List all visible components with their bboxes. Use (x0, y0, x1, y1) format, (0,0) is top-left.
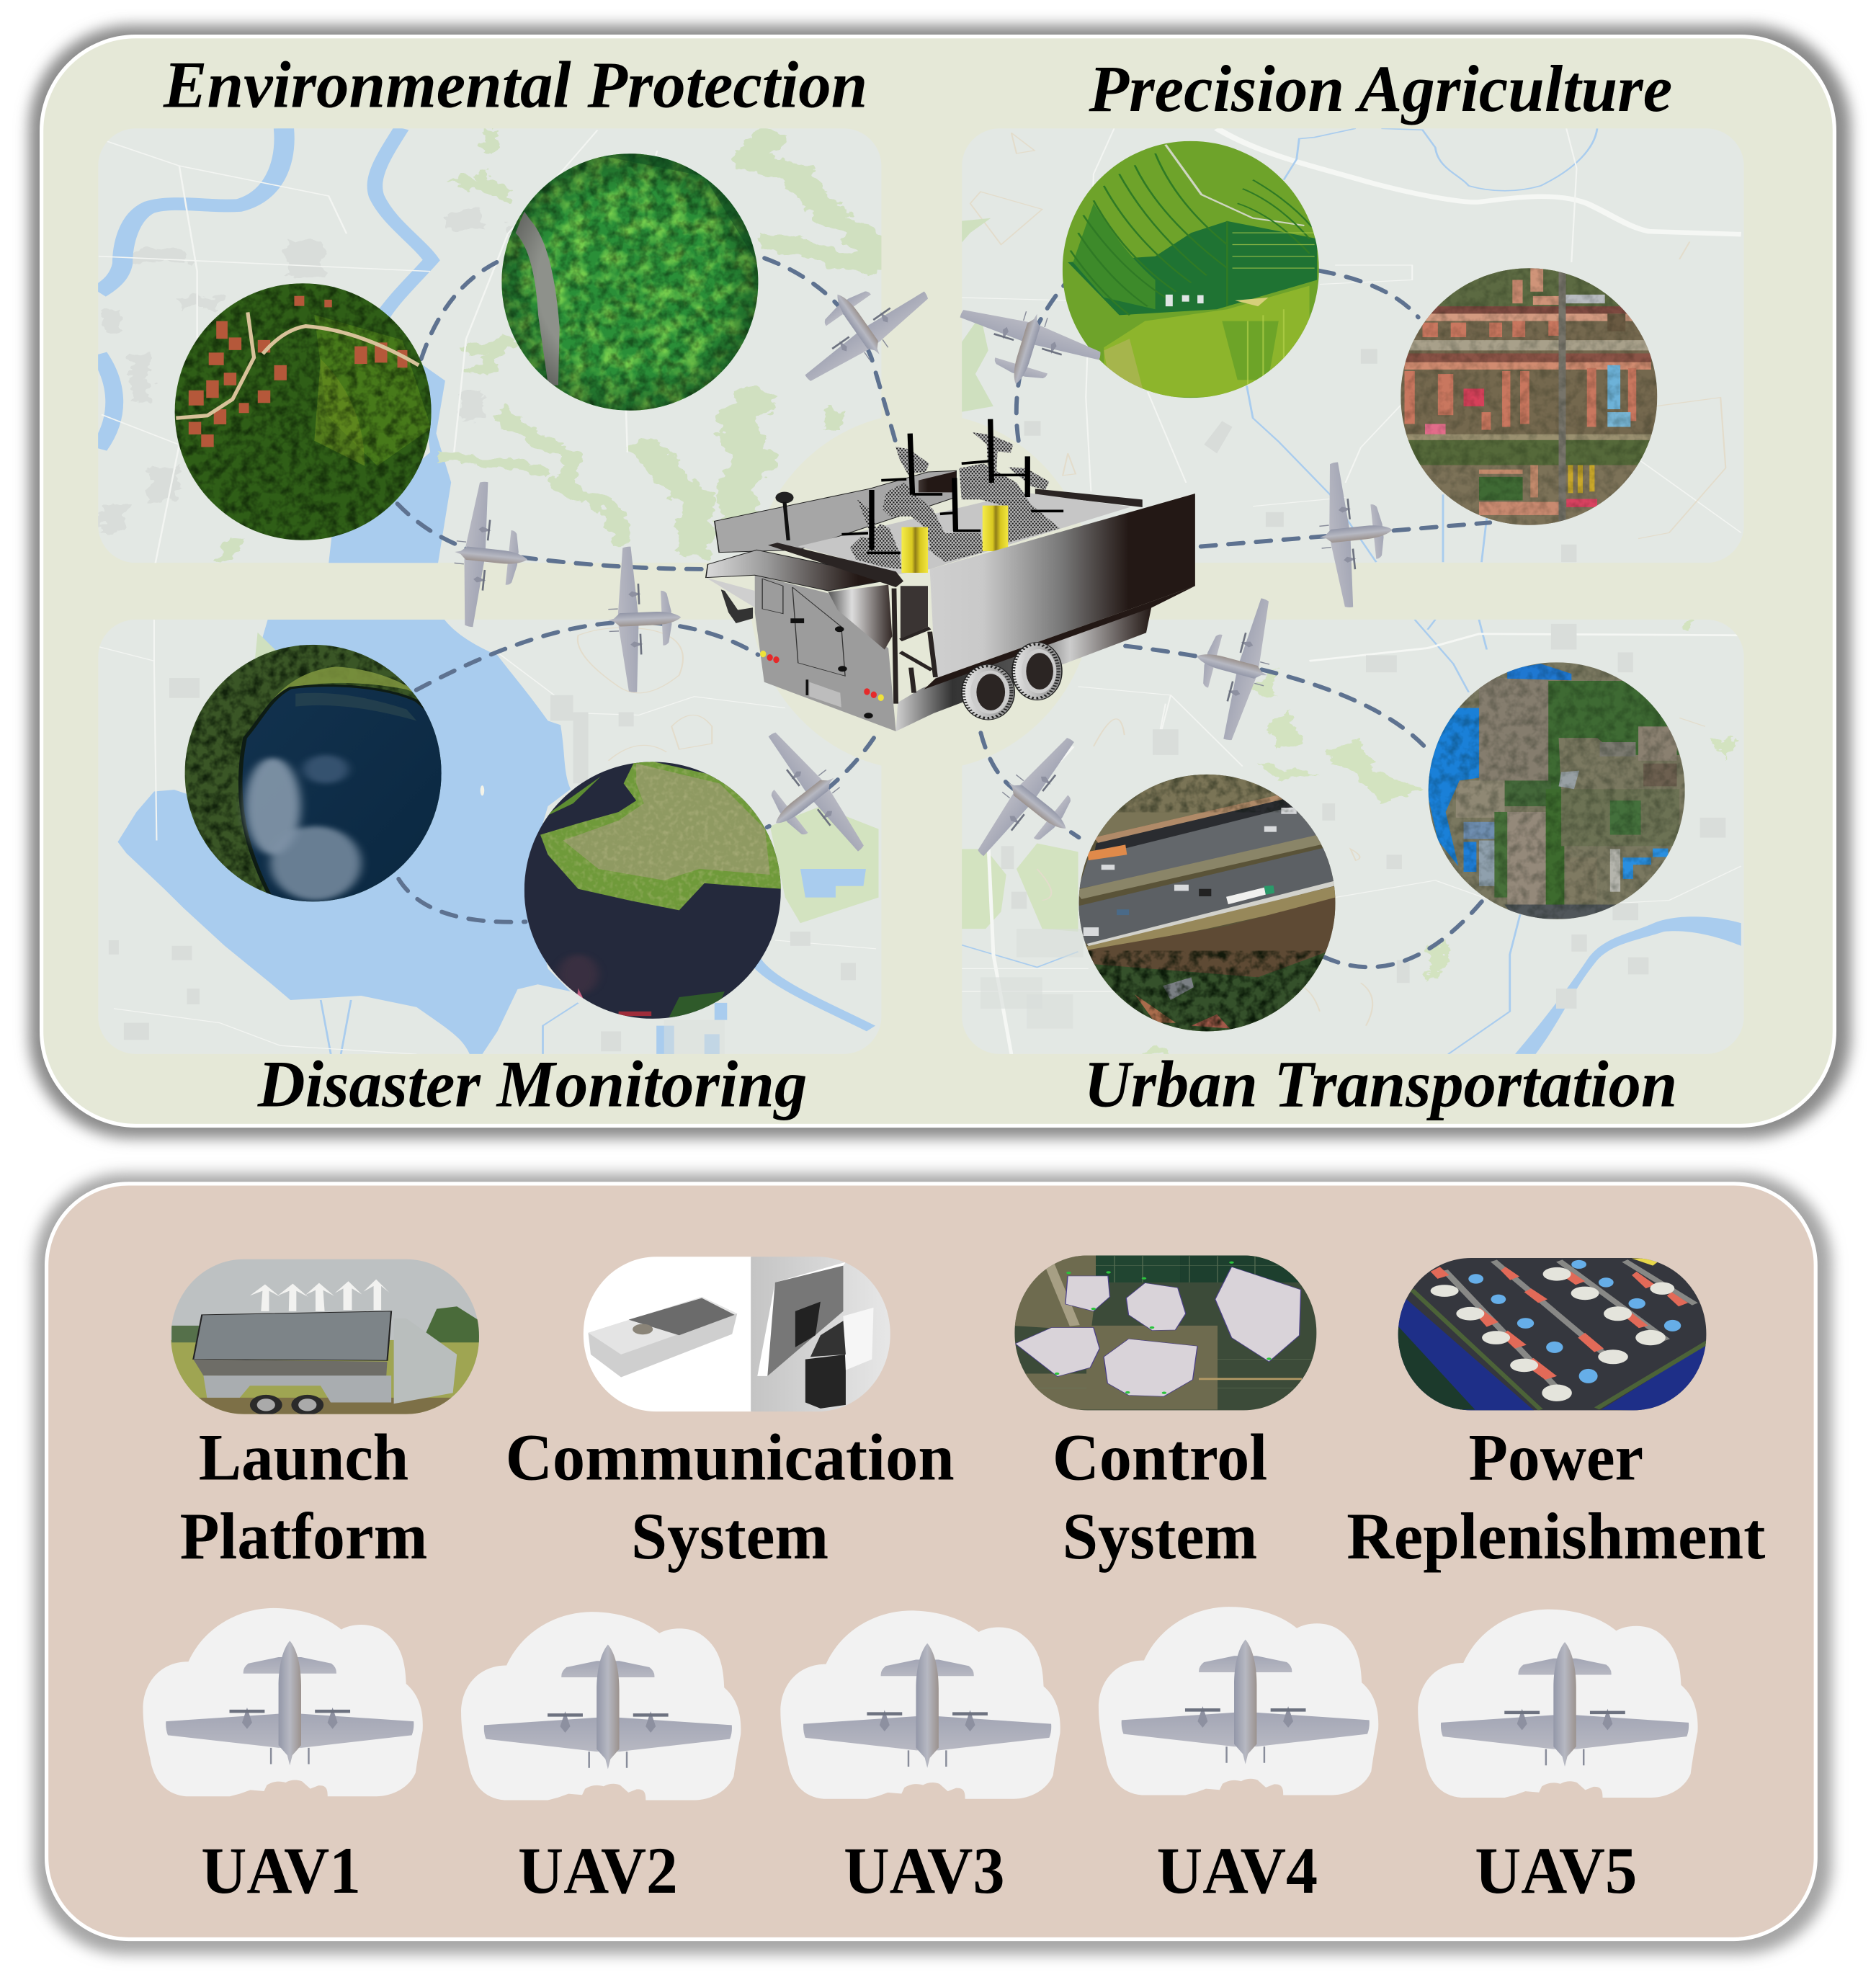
central clearing behind the launch vehicle (749, 413, 1094, 771)
photo: town rooftops (1401, 268, 1657, 525)
UAV5 card (1418, 1610, 1698, 1908)
heading: environmental protection: Environmental Protection (163, 48, 867, 122)
UAV3 card: UAV3 (844, 1834, 1005, 1908)
plane: agriculture route, lower (1312, 458, 1400, 610)
antenna mast (775, 492, 794, 540)
photo: terraced fields (1063, 141, 1319, 398)
launch vehicle illustration (706, 419, 1195, 731)
heading: precision agriculture: Precision Agriculture (1088, 53, 1672, 126)
plane: agriculture route, upper (946, 293, 1107, 405)
plane: urban route, upper (1178, 586, 1286, 746)
panel: system components (34, 1174, 1832, 1954)
label: communication system: Communication (506, 1422, 955, 1495)
flight paths: dashed routes (398, 258, 1490, 967)
map: environmental protection (98, 128, 881, 563)
UAV4 card (1099, 1607, 1378, 1908)
map: precision agriculture (960, 128, 1744, 563)
heading: urban transportation: Urban Transportation (1084, 1048, 1677, 1121)
thumbnail: communication hardware (578, 1254, 895, 1414)
label: control system (1053, 1422, 1267, 1574)
photo: village and hillside (175, 283, 432, 540)
label: communication system: System (631, 1500, 828, 1574)
overhanging hood (706, 550, 896, 591)
UAV2 card (461, 1612, 741, 1908)
UAV3 card (780, 1610, 1060, 1908)
plane: disaster route, upper (605, 545, 684, 693)
label: power replenishment: Replenishment (1346, 1500, 1766, 1574)
plane: disaster route, lower (731, 720, 878, 880)
label: control system: System (1063, 1500, 1257, 1574)
label: launch platform: Launch (199, 1422, 408, 1495)
yellow launch cylinders (901, 506, 1008, 573)
tail lights (760, 651, 884, 701)
label: power replenishment (1346, 1422, 1766, 1574)
map: urban transportation (960, 620, 1744, 1056)
UAV1 card (143, 1608, 423, 1908)
rear face with doors (755, 575, 896, 731)
UAV5 card: UAV5 (1475, 1834, 1637, 1908)
photo: industrial site (1425, 662, 1685, 919)
thumbnail: control system map (1011, 1254, 1321, 1412)
side wall (930, 494, 1195, 679)
thumbnail: launch platform photo (164, 1256, 487, 1417)
photo: dark lake with forest shore (185, 645, 447, 906)
plane: environmental route, lower (447, 479, 535, 632)
label: launch platform: Platform (180, 1500, 427, 1574)
heading: disaster monitoring: Disaster Monitoring (257, 1048, 807, 1121)
frame bars (894, 589, 935, 704)
panel: application scenarios (29, 25, 1851, 1138)
UAV4 card: UAV4 (1157, 1834, 1318, 1908)
plane: urban route, lower (963, 726, 1111, 885)
photo: forest canopy with walkway (501, 153, 758, 411)
nested drones on the launch rack (841, 419, 1063, 569)
photo: marsh island on dark water (524, 758, 782, 1019)
label: control system: Control (1053, 1422, 1267, 1495)
thumbnail: battery pack (1395, 1256, 1709, 1412)
trailer lower body (896, 605, 1152, 731)
photo: highway from above (1073, 772, 1340, 1032)
plane: environmental route, upper (778, 253, 939, 396)
UAV1 card: UAV1 (201, 1834, 361, 1908)
UAV2 card: UAV2 (518, 1834, 678, 1908)
label: launch platform (180, 1422, 427, 1574)
label: power replenishment: Power (1469, 1422, 1643, 1495)
map: disaster monitoring (98, 620, 881, 1056)
label: communication system (506, 1422, 955, 1574)
wheels (962, 643, 1062, 720)
